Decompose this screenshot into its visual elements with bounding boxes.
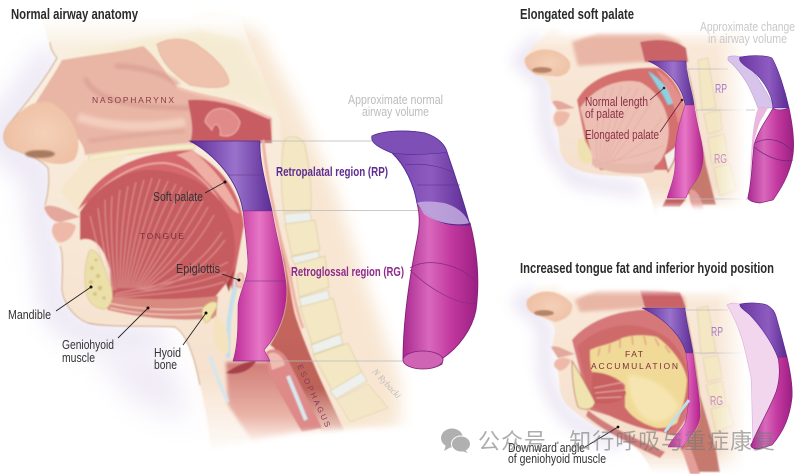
face shadow (520, 38, 640, 190)
label: soft palate (153, 180, 226, 204)
label: soft palate: Soft palate (153, 190, 203, 204)
top fade (560, 278, 730, 292)
hyoid bone (202, 302, 217, 323)
guide lines (686, 69, 755, 199)
label: esophagus: ESOPHAGUS (295, 363, 332, 428)
head skin (525, 28, 745, 222)
posterior pharyngeal wall (262, 145, 345, 436)
airway: purple segment (642, 308, 693, 353)
label: epiglottis: Epiglottis (176, 262, 220, 276)
label: hyoid bone (154, 312, 208, 372)
wall lining (263, 140, 303, 328)
eustachian opening (205, 108, 240, 136)
nostril (532, 67, 552, 73)
posterior wall (680, 308, 720, 472)
airway: pink segment (667, 105, 703, 198)
nose (527, 291, 572, 322)
geniohyoid muscle (100, 296, 218, 320)
sphenoid sinus (157, 39, 229, 88)
face outline (4, 42, 200, 385)
oral cavity (572, 310, 692, 436)
trachea (689, 190, 704, 214)
label: fat accumulation (591, 349, 678, 371)
skull base bone (62, 30, 278, 112)
retropalatal airway (purple) (190, 141, 272, 211)
tongue with fat accumulation (577, 325, 690, 432)
label: approximate normal airway volume (348, 93, 443, 119)
label: retropalatal region: Retropalatal region (RP) (276, 165, 388, 179)
label: fat accumulation: FAT (625, 349, 643, 359)
watermark: account name: 公众号 · 知行呼吸与重症康复 (478, 429, 775, 454)
volume change shape (727, 303, 792, 449)
label: epiglottis (176, 262, 240, 282)
title: normal airway anatomy: Normal airway anatomy (11, 7, 138, 23)
laryngeal opening (226, 361, 256, 374)
nasal conchae (78, 66, 195, 141)
guide lines (685, 310, 755, 353)
label: geniohyoid muscle: muscle (62, 351, 95, 365)
rear neck tissue fade (190, 22, 400, 445)
nasal cavity (575, 288, 686, 312)
chin muscle band (592, 158, 655, 174)
epiglottis (664, 145, 677, 172)
tongue (580, 81, 669, 168)
anatomy illustration (527, 284, 745, 474)
nose (525, 49, 570, 76)
label: approximate change in airway volume (700, 20, 795, 46)
right fade (716, 282, 746, 474)
panel: elongated soft palate (520, 18, 795, 230)
nasal cavity (30, 46, 272, 155)
label: RP: RP (715, 82, 727, 96)
nasopharynx rear wall (188, 100, 272, 143)
label: hyoid bone: bone (154, 358, 177, 372)
nose (4, 102, 78, 164)
face shadow (520, 292, 620, 445)
label: elongated palate (585, 99, 683, 142)
trachea (682, 446, 700, 474)
label: normal length of palate (585, 87, 665, 121)
label: mandible (8, 286, 92, 322)
mandible (85, 250, 112, 309)
panel: normal airway anatomy (0, 18, 478, 474)
bottom fade (655, 206, 750, 230)
epiglottis (blue) (665, 400, 689, 432)
geniohyoid band (586, 410, 665, 458)
label: geniohyoid muscle: Geniohyoid (62, 338, 114, 352)
lavender shadow around face (0, 59, 190, 425)
upper lip (551, 346, 575, 358)
spine (697, 306, 734, 432)
label: downward angle of geniohyoid muscle: Downward angle (508, 441, 585, 455)
anatomy illustration (4, 18, 388, 462)
label: mandible: Mandible (8, 308, 51, 322)
right fade (716, 26, 746, 226)
spine (698, 58, 736, 196)
upper lip (552, 101, 575, 110)
lower lip (554, 358, 571, 371)
airway: purple segment (648, 61, 694, 105)
palate bone (88, 144, 195, 161)
throat tissue (226, 362, 325, 445)
nasopharynx rear wall (640, 40, 688, 62)
label: retroglossal region: Retroglossal region (RG) (291, 265, 404, 279)
upper lip (44, 206, 80, 222)
normal length of palate (blue) (648, 71, 675, 105)
elongated palate (656, 70, 684, 124)
nasopharynx rear wall (640, 290, 686, 308)
label: nasopharynx: NASOPHARYNX (92, 95, 174, 105)
posterior wall (686, 62, 716, 205)
airway: pink segment (668, 353, 700, 447)
label: approximate change in airway volume: in airway volume (708, 32, 787, 46)
lower lip (52, 222, 76, 242)
nostril (534, 310, 554, 316)
label: elongated palate: Elongated palate (585, 128, 659, 142)
inner mucosa band (84, 163, 225, 215)
palate mucosa (78, 150, 244, 290)
volume change shape (728, 56, 794, 203)
label: downward angle of geniohyoid muscle: of geniohyoid muscle (508, 452, 606, 466)
retroglossal airway (pink) (233, 211, 286, 361)
label: geniohyoid muscle (62, 306, 150, 365)
label: hyoid bone: Hyoid (154, 346, 181, 360)
signature: N Rybacki (370, 366, 403, 401)
bottom fade (205, 428, 420, 474)
epiglottis and larynx (210, 268, 244, 402)
label: approximate normal airway volume: Approximate normal (348, 93, 443, 107)
label: normal length of palate: of palate (585, 107, 624, 121)
label: RG: RG (714, 152, 727, 166)
guide lines (260, 141, 418, 361)
anatomy illustration (525, 28, 745, 222)
title: elongated soft palate: Elongated soft palate (520, 7, 634, 23)
lower lip (554, 111, 570, 126)
airway volume 3D shape (372, 131, 478, 369)
esophagus and trachea (266, 349, 322, 432)
label: fat accumulation: ACCUMULATION (591, 361, 678, 371)
airway level marks (228, 175, 285, 361)
skull base edge (178, 88, 270, 118)
label: normal length of palate: Normal length (585, 95, 648, 109)
soft palate (175, 150, 240, 214)
label: downward angle of geniohyoid muscle (508, 426, 619, 466)
nasal cavity (572, 32, 688, 66)
top fade (560, 18, 730, 34)
label: tongue: TONGUE (140, 231, 184, 241)
mandible (572, 361, 595, 409)
oral cavity and palate (577, 68, 685, 170)
mandible (577, 138, 592, 164)
head skin (4, 18, 300, 462)
watermark: wechat icon (441, 428, 470, 453)
label: approximate normal airway volume: airway volume (362, 105, 429, 119)
spine (281, 137, 388, 422)
label: RG: RG (710, 394, 723, 408)
throat opening (662, 199, 686, 207)
tongue (80, 170, 235, 301)
nostril (25, 150, 55, 158)
cheek tissue (60, 154, 128, 212)
panel: increased tongue fat and inferior hyoid position (508, 278, 792, 474)
label: RP: RP (711, 325, 723, 339)
head skin (527, 284, 745, 474)
